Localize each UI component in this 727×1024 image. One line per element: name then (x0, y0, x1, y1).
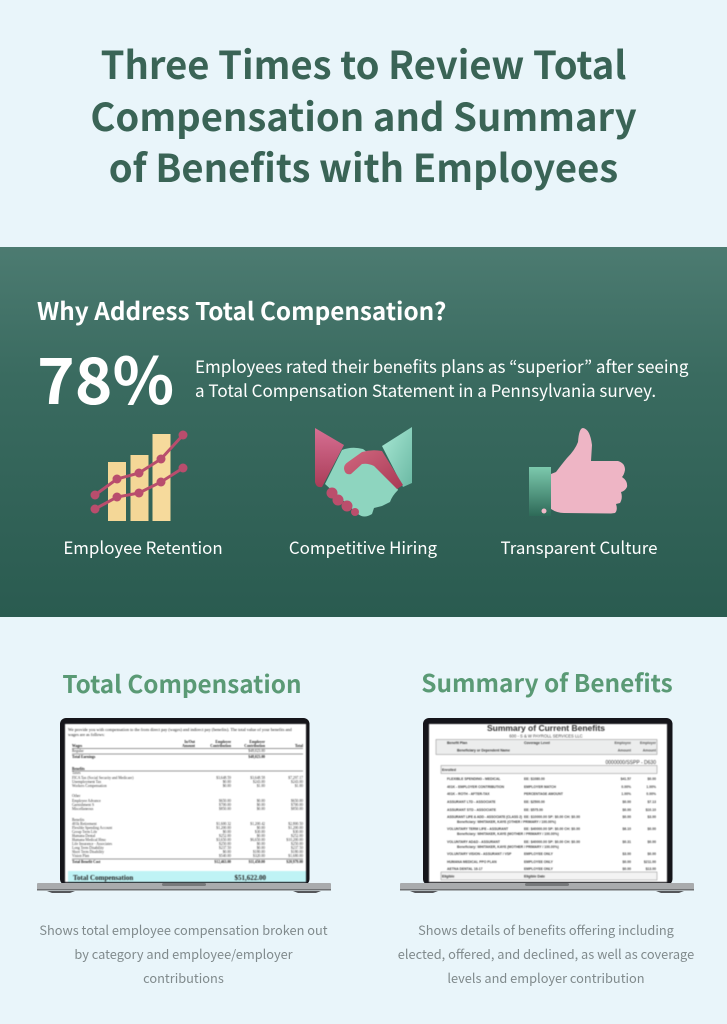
benefits sheet: EMPLOYEE ONLY (524, 852, 554, 856)
benefits sheet: Coverage Level (524, 741, 550, 745)
statement sheet: FICA Tax (Social Security and Medicare) (72, 776, 134, 780)
benefits sheet: ASSURANT STD - ASSOCIATE (447, 808, 497, 812)
benefits sheet: $211.00 (644, 860, 656, 864)
statement sheet: $0.00 (257, 834, 265, 838)
statistic description (195, 353, 689, 402)
icon: thumbs up (529, 428, 628, 516)
statement sheet: Employee Advance (72, 799, 101, 803)
benefits sheet: VOLUNTARY AD&D - ASSURANT (447, 840, 501, 844)
benefits sheet: Beneficiary: WHITAKER, KAYE (MOTHER / PRIMARY / 100.00%) (457, 845, 559, 849)
statement sheet: $237.50 (291, 846, 303, 850)
title: of Benefits with Employees (109, 139, 618, 194)
label: employee retention: Employee Retention (63, 534, 223, 559)
benefits sheet: $0.00 (622, 867, 631, 871)
statement sheet: $0.00 (223, 784, 231, 788)
statement sheet: Miscellaneous (72, 807, 94, 811)
statement sheet: $250.00 (291, 842, 303, 846)
text: summary of benefits description (398, 920, 694, 987)
statement sheet: $1.00 (295, 784, 303, 788)
statement sheet: Life Insurance - Associates (72, 842, 113, 846)
statement sheet: $252.00 (291, 834, 303, 838)
statement sheet: Total Compensation (73, 874, 133, 882)
benefits sheet: $0.00 (648, 827, 656, 831)
statistic description: Employees rated their benefits plans as “superior” after seeing (195, 353, 689, 378)
label: competitive hiring: Competitive Hiring (289, 534, 437, 559)
benefits sheet: EE: $40000.00 SP: $0.00 CH: $0.00 (524, 827, 580, 831)
heading: summary of benefits: Summary of Benefits (421, 665, 673, 700)
statement sheet: $20,979.00 (286, 860, 303, 864)
benefits sheet: HUMANA MEDICAL PPO PLAN (447, 860, 497, 864)
statement sheet: 401k Retirement (72, 822, 97, 826)
text: total compensation description (39, 920, 328, 987)
statement sheet: Vision Plan (72, 854, 89, 858)
statement sheet: Benefits (72, 767, 85, 771)
benefits sheet: $6.10 (622, 827, 631, 831)
statement sheet: $1,200.00 (216, 826, 231, 831)
benefits sheet: $0.00 (622, 860, 631, 864)
statement sheet: $0.00 (223, 830, 231, 834)
laptop: total compensation statement (37, 718, 331, 893)
benefits sheet: PERCENTAGE AMOUNT (524, 792, 564, 796)
benefits sheet: EE: $10000.00 SP: $0.00 CH: $0.00 (524, 815, 580, 819)
benefits sheet: Eligible (442, 874, 454, 878)
statement sheet (65, 724, 306, 882)
benefits sheet: 0.00% (646, 792, 656, 796)
statement sheet: $0.00 (257, 807, 265, 811)
statement sheet: Humana Medical Hmo (72, 838, 106, 842)
benefits sheet: ASSURANT LTD - ASSOCIATE (447, 800, 496, 804)
benefits sheet: EMPLOYEE ONLY (524, 860, 554, 864)
statement sheet: $850.00 (219, 807, 231, 811)
benefits sheet: 401K - ROTH - AFTER-TAX (447, 792, 490, 796)
statement sheet: $700.00 (291, 803, 303, 807)
benefits sheet: Employee (614, 741, 631, 745)
benefits sheet: EMPLOYEE ONLY (524, 867, 554, 871)
benefits sheet: 600 - S & W PAYROLL SERVICES LLC (509, 734, 583, 738)
text: summary of benefits description: Shows details of benefits offering including (418, 920, 674, 939)
panel heading: Why Address Total Compensation? (37, 292, 446, 327)
statement sheet: $243.00 (253, 780, 265, 784)
statement sheet: $180.00 (291, 850, 303, 854)
statement sheet: $30.00 (255, 830, 265, 834)
benefits sheet: FLEXIBLE SPENDING - MEDICAL (447, 777, 500, 781)
benefits sheet: $0.00 (622, 808, 631, 812)
benefits sheet: Beneficiary: WHITAKER, KAYE (OTHER / PRIMARY / 100.00%) (457, 820, 556, 824)
benefits sheet: Summary of Current Benefits (487, 723, 605, 733)
laptop: summary of current benefits (400, 718, 694, 893)
benefits sheet: $3.00 (648, 815, 656, 819)
statement sheet: $1,200.00 (288, 826, 303, 831)
statement sheet: Short Term Disability (72, 850, 104, 854)
statement sheet: Workers Compensation (72, 784, 107, 788)
statistic description: a Total Compensation Statement in a Pennsylvania survey. (195, 376, 656, 402)
statement sheet: $2,800.50 (288, 822, 303, 827)
benefits sheet: AETNA DENTAL 16-17 (447, 867, 483, 871)
benefits sheet: Amount (643, 748, 657, 752)
statement sheet: $11,450.00 (249, 860, 265, 864)
statement sheet: $237.50 (219, 846, 231, 850)
benefits sheet: 1.00% (621, 792, 631, 796)
benefits sheet: Employer (640, 741, 657, 745)
statement sheet: $0.00 (257, 846, 265, 850)
statement sheet: $0.00 (257, 803, 265, 807)
benefits sheet: $41.57 (621, 777, 631, 781)
statement sheet: $250.00 (219, 842, 231, 846)
statement sheet: Contribution (244, 744, 265, 748)
statement sheet: $850.00 (291, 807, 303, 811)
label: transparent culture: Transparent Culture (501, 534, 657, 559)
statement sheet: We provide you with compensation to the from direct pay (wages) and indirect pay (benefits). The total value of your benefits and (68, 727, 293, 732)
statistic: 78%: 78% (37, 331, 174, 423)
statement sheet: $650.00 (219, 799, 231, 803)
statement sheet: $0.00 (257, 799, 265, 803)
statement sheet: $48,023.00 (248, 755, 265, 759)
statement sheet: $1,200.42 (250, 822, 265, 827)
text: total compensation description: contributions (143, 968, 224, 987)
statement sheet: Unemployment Tax (72, 780, 101, 784)
statement sheet: $6,650.00 (250, 838, 265, 843)
benefits sheet: $0.00 (648, 840, 656, 844)
benefits sheet: $3.00 (622, 852, 631, 856)
statement sheet: $3,650.00 (216, 838, 231, 843)
statement sheet: Humana Dental (72, 834, 95, 838)
statement sheet: $700.00 (219, 803, 231, 807)
statement sheet: Total Earnings (72, 755, 96, 759)
statement sheet: $51,622.00 (234, 874, 266, 882)
benefits sheet: 0.00% (621, 785, 631, 789)
icon: bar chart with rising lines (90, 430, 188, 521)
benefits sheet: $0.31 (622, 840, 631, 844)
statement sheet: In/Out (184, 740, 196, 744)
statement sheet: $252.00 (219, 834, 231, 838)
title: Compensation and Summary (90, 88, 637, 142)
benefits sheet: 401K - EMPLOYER CONTRIBUTION (447, 785, 505, 789)
statement sheet: $1,680.00 (288, 854, 303, 859)
statement sheet: Contribution (210, 744, 231, 748)
statement sheet: Flexible Spending Account (72, 826, 112, 830)
statement sheet: Total Benefit Cost (72, 860, 101, 864)
benefits sheet: 0000000/SSPP - D630 (605, 760, 656, 766)
statement sheet: Employer (249, 740, 265, 744)
statement sheet: $0.00 (223, 780, 231, 784)
benefits sheet: VOLUNTARY TERM LIFE - ASSURANT (447, 827, 509, 831)
statement sheet: $540.00 (219, 854, 231, 858)
benefits sheet: EE: $575.00 (524, 808, 543, 812)
icon: handshake (315, 427, 412, 516)
statement sheet: Wages (72, 744, 83, 748)
statement sheet: Regular (72, 749, 84, 753)
statement sheet: $0.00 (223, 850, 231, 854)
statement sheet: $1.00 (257, 784, 265, 788)
benefits sheet: $10.10 (646, 808, 656, 812)
benefits sheet: Beneficiary: WHITAKER, KAYE (MOTHER / PRIMARY / 100.00%) (457, 832, 559, 836)
benefits sheet: ASSURANT LIFE & ADD - ASSOCIATE (CLASS 2) (447, 815, 522, 819)
benefits sheet: $0.00 (622, 815, 631, 819)
statement sheet: Benefits (72, 818, 85, 822)
title (90, 36, 637, 194)
text: total compensation description: Shows total employee compensation broken out (39, 920, 328, 939)
benefits sheet: EMPLOYER MATCH (524, 785, 557, 789)
benefits sheet: EE: $1080.00 (524, 777, 545, 781)
benefits sheet: Amount (618, 748, 632, 752)
benefits sheet: $0.00 (622, 800, 631, 804)
title: Three Times to Review Total (101, 36, 626, 91)
text: summary of benefits description: elected, offered, and declined, as well as coverage (398, 944, 694, 963)
statement sheet: Group Term Life (72, 830, 97, 834)
panel: why address total compensation (0, 247, 727, 617)
statement sheet: $7,297.17 (288, 776, 303, 781)
statement sheet: $180.00 (253, 850, 265, 854)
heading: total compensation: Total Compensation (62, 665, 302, 700)
statement sheet: $3,648.59 (216, 776, 231, 781)
benefits sheet: VOLUNTARY VISION - ASSURANT / VSP (447, 852, 512, 856)
benefits sheet: $7.13 (648, 800, 656, 804)
statement sheet: $3,648.58 (250, 776, 265, 781)
benefits sheet: $13.00 (646, 867, 656, 871)
statement sheet: Total (295, 744, 303, 748)
benefits sheet: Beneficiary or Dependent Name (457, 748, 510, 752)
statement sheet: $30.00 (293, 830, 303, 834)
benefits sheet: Benefit Plan (447, 741, 467, 745)
statement sheet: Garnishment S (72, 803, 94, 807)
statement sheet: $10,200.00 (286, 838, 303, 843)
statement sheet: Taxes (72, 771, 81, 775)
statement sheet: $48,023.00 (248, 749, 265, 754)
statement sheet: $0.00 (257, 826, 265, 830)
benefits sheet (429, 723, 667, 882)
statement sheet: wages are as follows: (68, 732, 105, 737)
benefits sheet: EE: $2500.00 (524, 800, 545, 804)
benefits sheet: $0.00 (648, 852, 656, 856)
benefits sheet: $0.00 (648, 777, 656, 781)
statement sheet: Employee (215, 740, 231, 744)
statement sheet: Amount (182, 744, 196, 748)
benefits sheet: 1.00% (646, 785, 656, 789)
statement sheet: $650.00 (291, 799, 303, 803)
statement sheet: $0.00 (257, 842, 265, 846)
statement sheet: $243.00 (291, 780, 303, 784)
text: summary of benefits description: levels and employer contribution (447, 968, 645, 987)
statement sheet: $1,600.32 (216, 822, 231, 827)
benefits sheet: Enrolled (442, 768, 456, 772)
benefits sheet: EE: $40000.00 SP: $0.00 CH: $0.00 (524, 840, 580, 844)
statement sheet: $320.00 (253, 854, 265, 858)
statement sheet: $12,463.00 (214, 860, 231, 864)
statement sheet: Long Term Disability (72, 846, 104, 850)
text: total compensation description: by category and employee/employer (74, 944, 293, 963)
benefits sheet: Eligible Date (524, 874, 545, 878)
statement sheet: Other (72, 794, 81, 798)
